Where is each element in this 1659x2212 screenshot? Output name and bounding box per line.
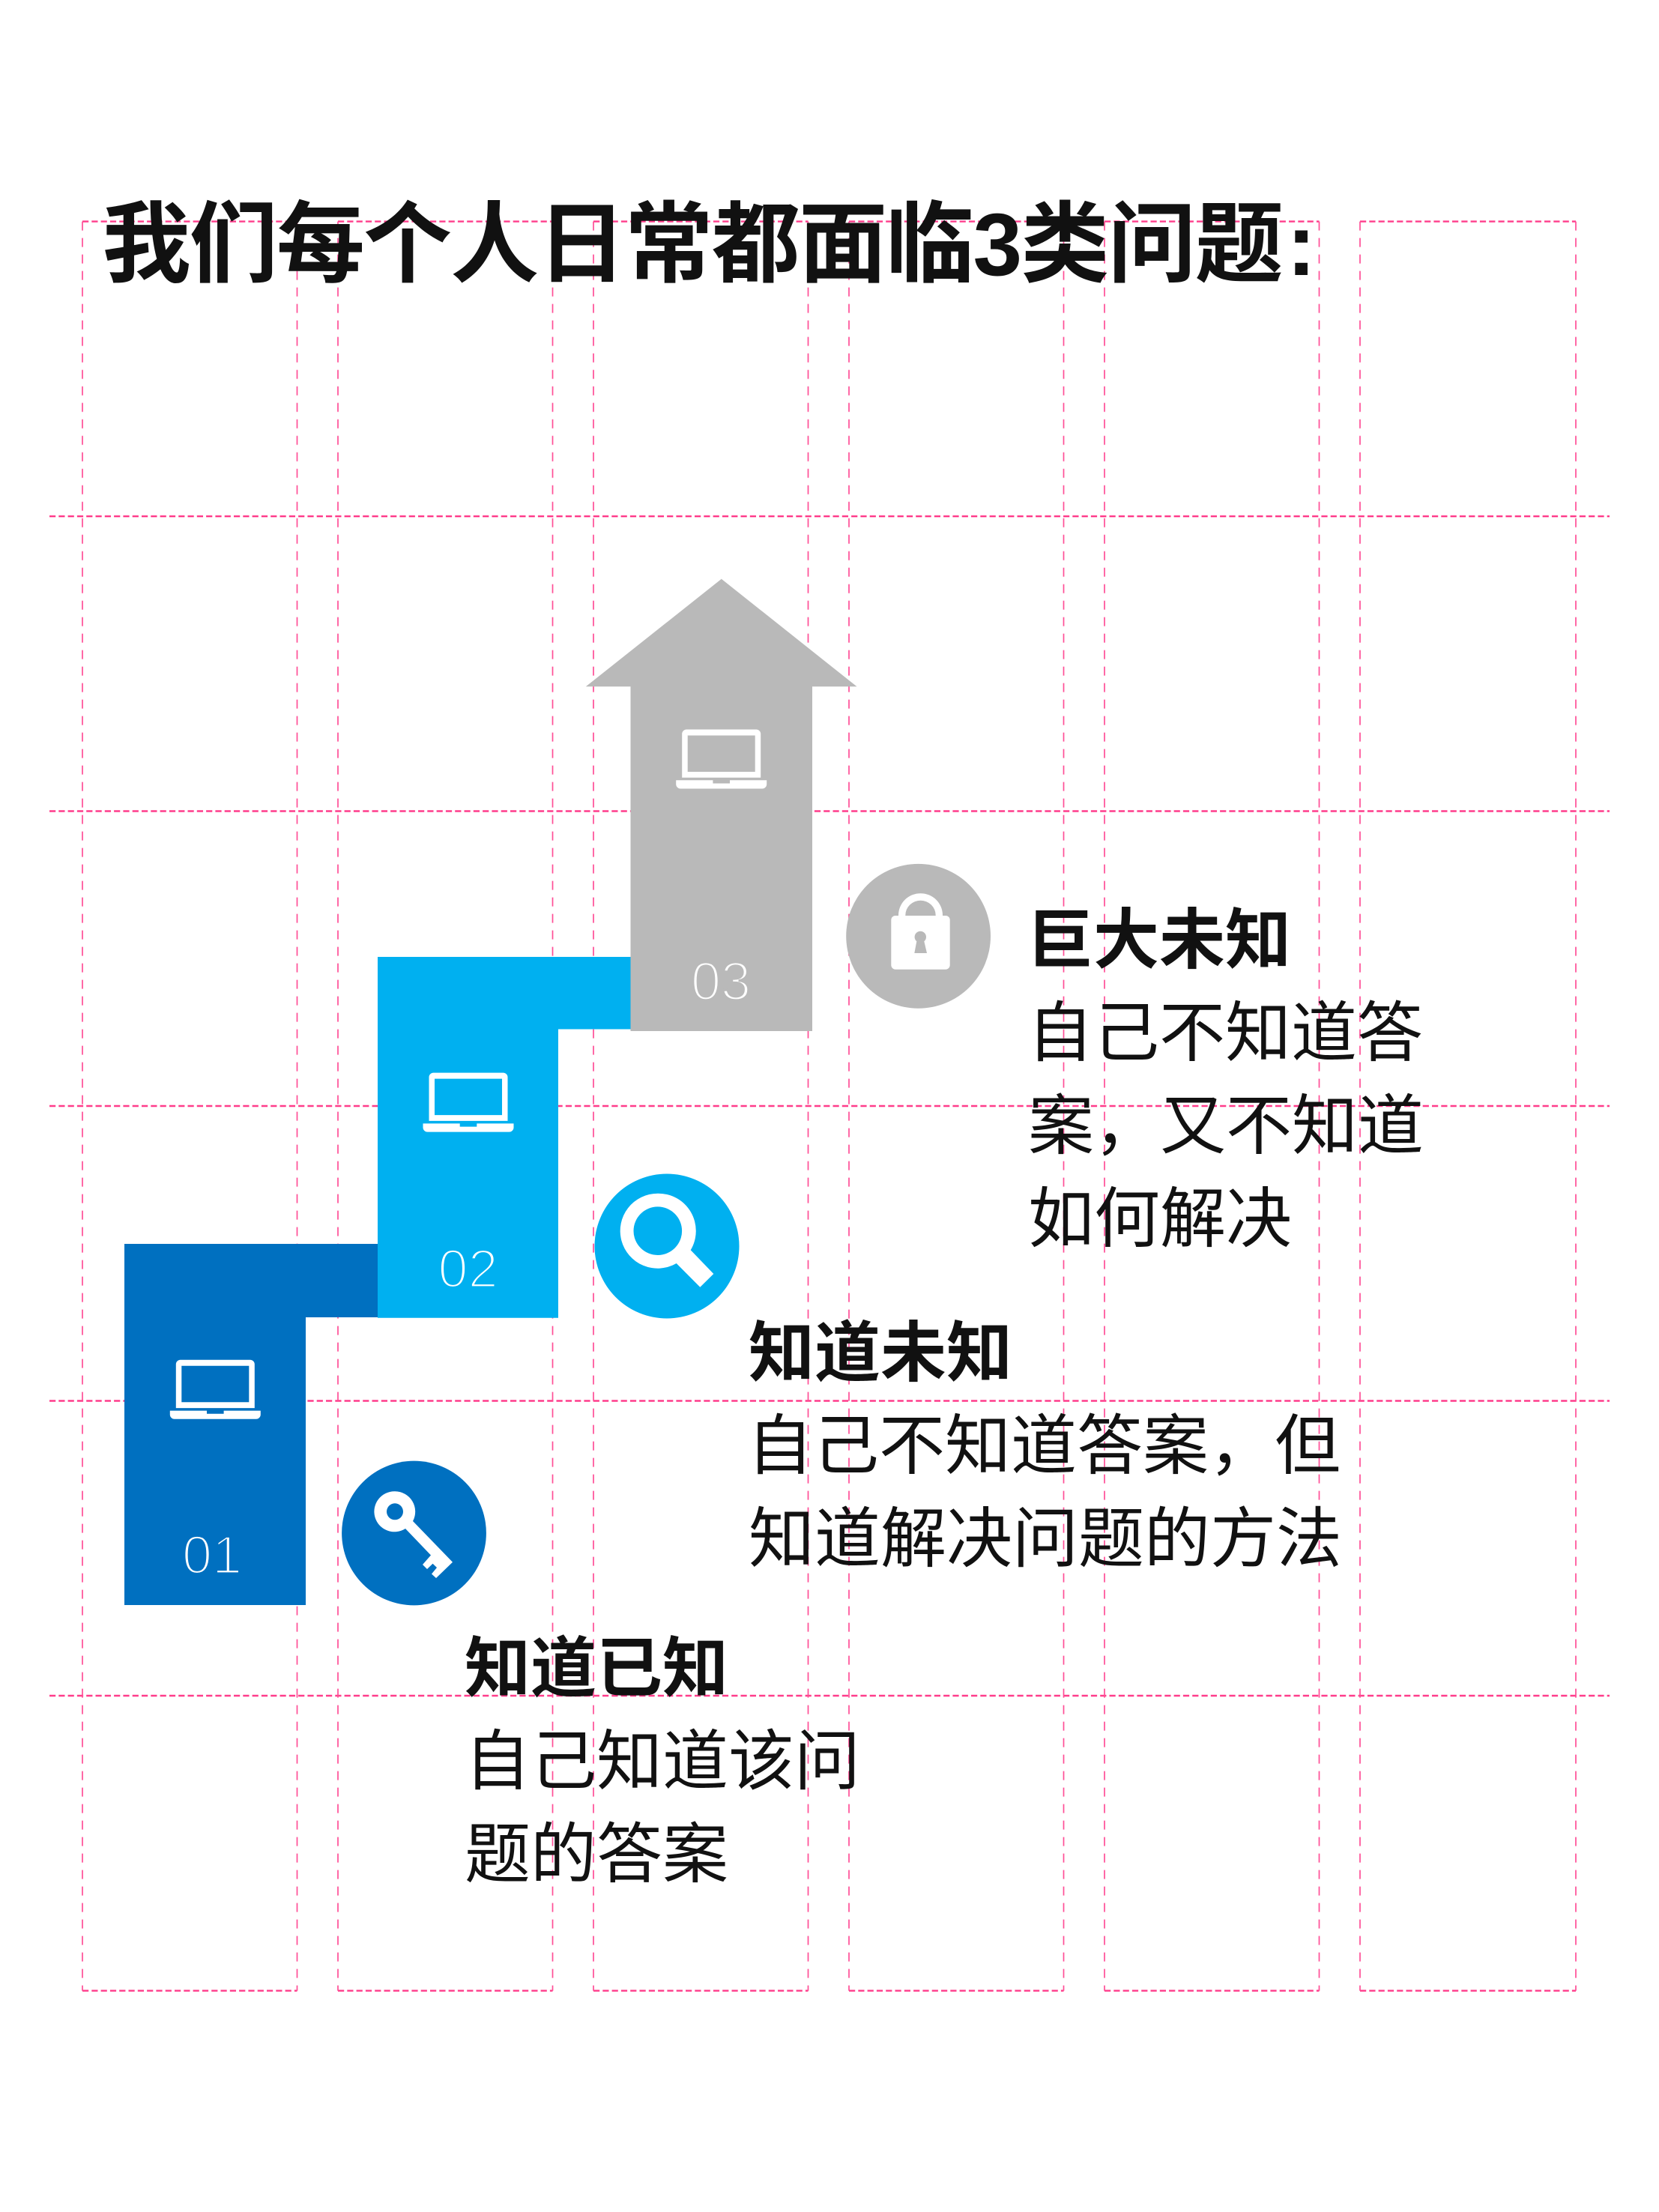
description: 知道已知: 自己知道该问 [465,1724,860,1798]
heading: 知道已知: 知道已知 [465,1631,728,1705]
description: 巨大未知 [1027,996,1424,1256]
number 01: 01 [182,1526,242,1586]
number 03: 03 [691,952,751,1012]
text block: 知道已知 [465,1631,860,1891]
heading: 知道未知: 知道未知 [749,1316,1012,1390]
icon: laptop 03 [676,730,767,788]
step 02 block [378,957,631,1318]
title: : [1287,196,1314,294]
description: 巨大未知: 自己不知道答 [1027,996,1423,1070]
icon: laptop 01 [170,1360,261,1419]
description: 知道未知: 知道解决问题的方法 [749,1502,1342,1576]
step 01 block [124,1244,378,1605]
number 02: 02 [438,1239,498,1299]
title: 我们每个人日常都面临3类问题 [102,196,1282,294]
icon: lock circle [846,864,991,1009]
description: 巨大未知: 如何解决 [1028,1182,1292,1256]
panel: staircase arrow [124,579,857,1605]
description: 知道已知: 题的答案 [465,1817,728,1891]
step 03 arrow [586,579,857,1031]
description: 知道未知 [747,1409,1342,1576]
description: 知道已知 [465,1724,860,1891]
description: 知道未知: 自己不知道答案，但 [747,1409,1341,1483]
text block: 巨大未知 [1027,903,1424,1256]
icon: key circle [342,1461,486,1605]
heading: 巨大未知: 巨大未知 [1027,903,1291,977]
description: 巨大未知: 案，又不知道 [1028,1089,1424,1163]
icon: laptop 02 [423,1073,514,1132]
icon: magnifier circle [595,1173,739,1319]
text block: 知道未知 [747,1316,1342,1576]
